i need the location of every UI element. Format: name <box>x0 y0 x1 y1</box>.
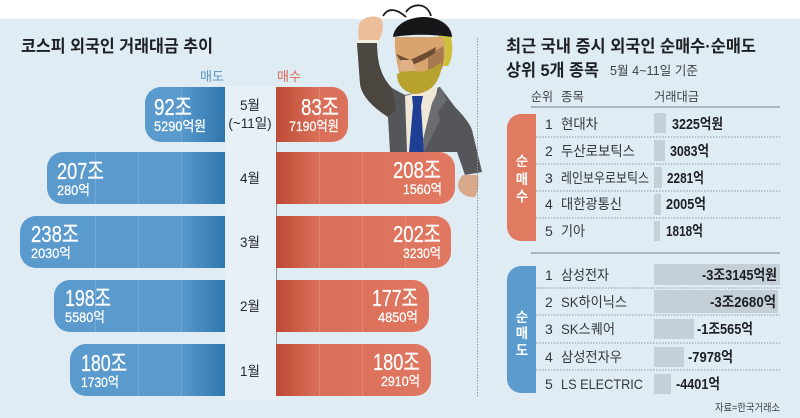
rows: 삼성전자우 <box>561 349 622 365</box>
values: sell: 280억 <box>57 182 90 198</box>
raised fist <box>358 17 383 41</box>
values: buy: 3230억 <box>403 245 441 261</box>
value bars <box>654 113 666 241</box>
values: 2281억 <box>667 170 704 187</box>
values: sell: 207조 <box>57 158 104 184</box>
values: buy: 177조 <box>372 285 418 311</box>
rows: 2 <box>545 143 553 159</box>
rows: 3 <box>545 321 553 337</box>
nose <box>399 60 416 73</box>
values: buy: 4850억 <box>378 309 418 325</box>
values: sell: 5580억 <box>65 309 105 325</box>
rows: 레인보우로보틱스 <box>561 170 649 186</box>
rows: 2 <box>545 294 553 310</box>
values: 1818억 <box>666 223 703 240</box>
heading: top 5 stocks: 최근 국내 증시 외국인 순매수·순매도 <box>506 37 756 56</box>
table header: 거래대금 <box>654 90 699 104</box>
values: sell: 198조 <box>65 285 111 311</box>
panel: net buy table <box>507 113 780 241</box>
bar chart: sell bars <box>20 87 225 396</box>
antennae <box>383 5 431 17</box>
rows: 4 <box>545 196 553 212</box>
rows: 삼성전자 <box>561 267 609 283</box>
illustration: angry foreign investor <box>357 5 482 197</box>
side tag: net buy <box>507 114 536 241</box>
rows: LS ELECTRIC <box>561 376 643 392</box>
values: buy: 180조 <box>373 349 420 375</box>
heading: KOSPI trend: 코스피 외국인 거래대금 추이 <box>21 37 213 56</box>
values: -3조3145억원 <box>702 267 777 284</box>
values: -7978억 <box>688 349 733 366</box>
date note: 5월 4~11일 기준 <box>610 64 698 78</box>
month labels: 2월 <box>240 299 260 314</box>
panel: KOSPI foreign trading trend <box>20 5 482 400</box>
face <box>395 37 445 82</box>
panel divider: dotted line <box>476 38 478 397</box>
values: 3083억 <box>670 143 709 160</box>
month labels: (~11일) <box>228 116 272 131</box>
month labels: 5월 <box>240 98 260 113</box>
values: buy: 1560억 <box>403 181 442 197</box>
source note: 자료=한국거래소 <box>715 402 780 414</box>
values: -4401억 <box>676 376 720 393</box>
side tag: net sell <box>507 266 536 393</box>
month labels: 4월 <box>240 171 260 186</box>
rows: 현대차 <box>561 116 598 132</box>
values: buy: 7190억원 <box>289 118 339 134</box>
brow shadow <box>396 47 436 65</box>
panel: net sell table <box>507 252 780 394</box>
black hat <box>393 17 452 37</box>
label: buy: 매수 <box>277 69 301 84</box>
values: 3225억원 <box>672 116 723 133</box>
rows: 1 <box>545 116 553 132</box>
rows <box>545 116 649 239</box>
label: sell: 매도 <box>200 69 224 84</box>
rows: 3 <box>545 170 553 186</box>
shirt <box>405 86 438 152</box>
side tag: net sell: 매 <box>516 326 528 341</box>
table header <box>531 90 780 108</box>
rows: 대한광통신 <box>561 196 622 212</box>
values: buy: 2910억 <box>381 373 420 389</box>
value bars <box>654 264 780 394</box>
table header: 종목 <box>561 90 584 104</box>
values <box>676 267 777 393</box>
values: buy: 208조 <box>393 157 441 183</box>
values: -3조2680억 <box>710 294 776 311</box>
rows: SK스퀘어 <box>561 321 615 337</box>
side tag: net buy: 순 <box>516 154 528 169</box>
values: buy: 83조 <box>301 94 339 120</box>
rows: 두산로보틱스 <box>561 143 635 159</box>
side tag: net sell: 도 <box>516 343 528 358</box>
values: buy <box>289 94 442 389</box>
values: sell: 1730억 <box>81 374 119 390</box>
values: sell: 180조 <box>81 350 127 376</box>
side tag: net buy: 수 <box>516 189 528 204</box>
values <box>666 116 723 240</box>
rows: 1 <box>545 267 553 283</box>
month labels: 3월 <box>240 235 260 250</box>
lapel <box>423 87 447 152</box>
hair <box>438 36 452 66</box>
values: sell: 238조 <box>31 221 79 247</box>
heading: top 5 stocks <box>506 37 756 80</box>
necktie <box>409 96 424 152</box>
rows: 5 <box>545 223 553 239</box>
raised sleeve <box>357 43 396 117</box>
values: 2005억 <box>666 196 706 213</box>
values: sell <box>31 94 206 390</box>
bar chart: buy bars <box>276 87 455 396</box>
side tag: net buy: 매 <box>516 172 528 187</box>
face shading <box>428 46 444 76</box>
rows <box>545 267 643 392</box>
center month strip <box>225 86 276 400</box>
values: buy: 202조 <box>393 221 441 247</box>
rows: 5 <box>545 376 553 392</box>
values: sell: 2030억 <box>31 245 71 261</box>
side tag: net sell: 순 <box>516 310 528 325</box>
rows: 기아 <box>561 223 585 239</box>
values: sell: 5290억원 <box>154 118 206 134</box>
beard <box>397 62 441 94</box>
values: sell: 92조 <box>154 94 192 120</box>
lower hand <box>458 175 478 197</box>
table header: 순위 <box>531 90 553 104</box>
heading: top 5 stocks: 상위 5개 종목 <box>506 61 599 80</box>
rows: SK하이닉스 <box>561 294 627 310</box>
values: -1조565억 <box>697 321 753 338</box>
rows: 4 <box>545 349 553 365</box>
center strip edge <box>276 142 277 396</box>
month labels <box>228 98 272 379</box>
jacket <box>357 43 482 175</box>
month labels: 1월 <box>240 364 260 379</box>
shirt cuff <box>358 40 378 43</box>
